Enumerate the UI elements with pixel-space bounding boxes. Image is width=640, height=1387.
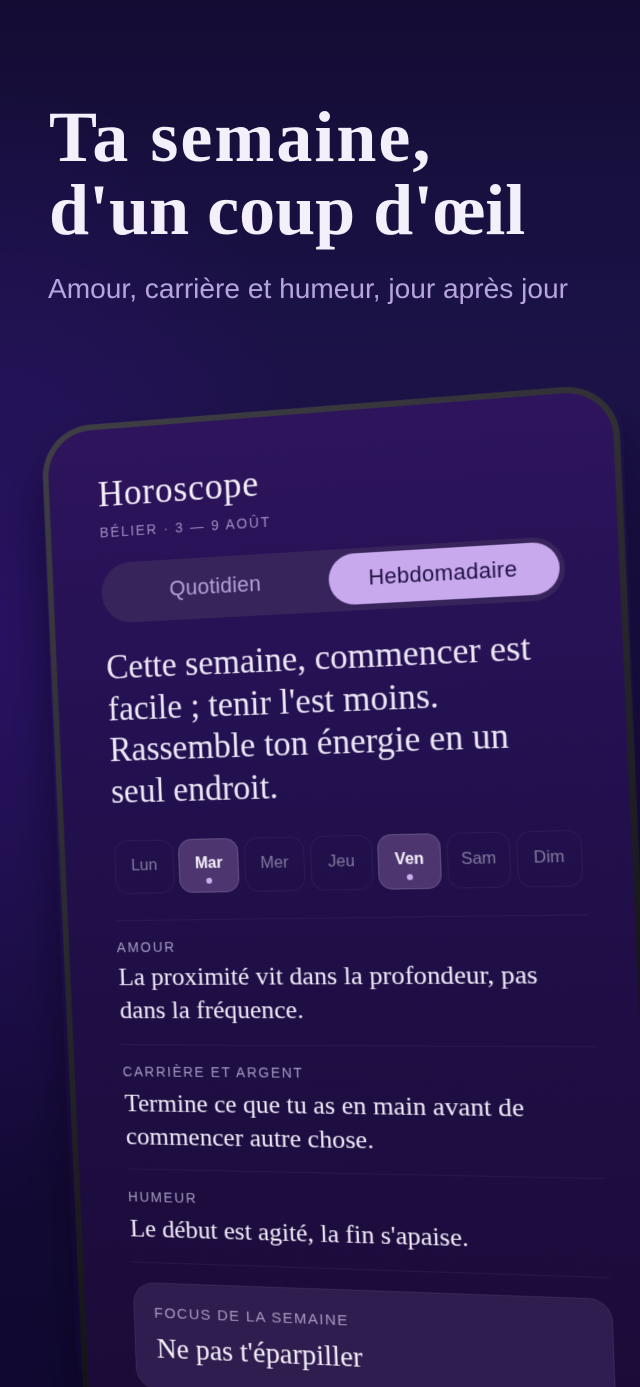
day: Mer — [243, 836, 306, 892]
text: humeur: Le début est agité, la fin s'apaise. — [129, 1214, 469, 1252]
text: amour: La proximité vit dans la profondeur, pas — [118, 960, 538, 991]
toggle active pill: Hebdomadaire: Hebdomadaire — [368, 556, 518, 589]
focus text: Ne pas t'éparpiller — [156, 1333, 363, 1374]
section: carrière et argent — [122, 1063, 525, 1155]
day: Sam: Sam — [461, 849, 497, 868]
section: amour — [116, 939, 538, 1024]
app title: Horoscope: Horoscope — [97, 463, 260, 515]
toggle option: Quotidien: Quotidien — [169, 571, 262, 600]
label: humeur: HUMEUR — [128, 1189, 197, 1206]
day: Ven active: Ven — [394, 850, 424, 868]
day: Lun — [114, 839, 175, 894]
title — [49, 97, 525, 250]
lead paragraph — [106, 628, 532, 811]
label: carrière et argent: CARRIÈRE ET ARGENT — [122, 1063, 304, 1080]
text: amour — [118, 960, 538, 1024]
date line: BÉLIER · 3 — 9 AOÛT — [99, 513, 271, 540]
lead paragraph: Rassemble ton énergie en un — [109, 716, 510, 769]
day: Sam — [446, 831, 512, 889]
day: Dim: Dim — [533, 847, 565, 866]
section: humeur — [128, 1189, 469, 1252]
phone frame and screen — [42, 386, 640, 1387]
day selector — [114, 830, 582, 894]
lead paragraph: seul endroit. — [110, 768, 279, 811]
lead paragraph: Cette semaine, commencer est — [106, 628, 531, 687]
day: Mar active — [178, 838, 240, 893]
day: Dim — [516, 830, 583, 887]
subtitle: Amour, carrière et humeur, jour après jour — [48, 273, 568, 304]
text: carrière et argent — [124, 1089, 525, 1155]
panel: phone mockup — [27, 386, 640, 1387]
title: d'un coup d'œil — [49, 170, 525, 250]
focus label: FOCUS DE LA SEMAINE — [154, 1305, 349, 1329]
text: carrière et argent: commencer autre chose. — [125, 1122, 374, 1155]
day: Mar active: Mar — [195, 854, 223, 872]
day: Lun: Lun — [131, 856, 158, 874]
text: amour: dans la fréquence. — [119, 995, 304, 1024]
day: Mer: Mer — [260, 853, 289, 871]
card: focus de la semaine — [133, 1281, 616, 1387]
label: amour: AMOUR — [117, 939, 176, 955]
title: Ta semaine, — [49, 97, 432, 177]
text: carrière et argent: Termine ce que tu as en main avant de — [124, 1089, 525, 1123]
lead paragraph: facile ; tenir l'est moins. — [107, 676, 439, 728]
day: Ven active — [377, 833, 442, 890]
day: Jeu: Jeu — [328, 852, 355, 870]
day: Jeu — [309, 835, 374, 891]
toggle: quotidien / hebdomadaire — [100, 535, 566, 623]
toggle active pill: Hebdomadaire — [328, 541, 560, 605]
